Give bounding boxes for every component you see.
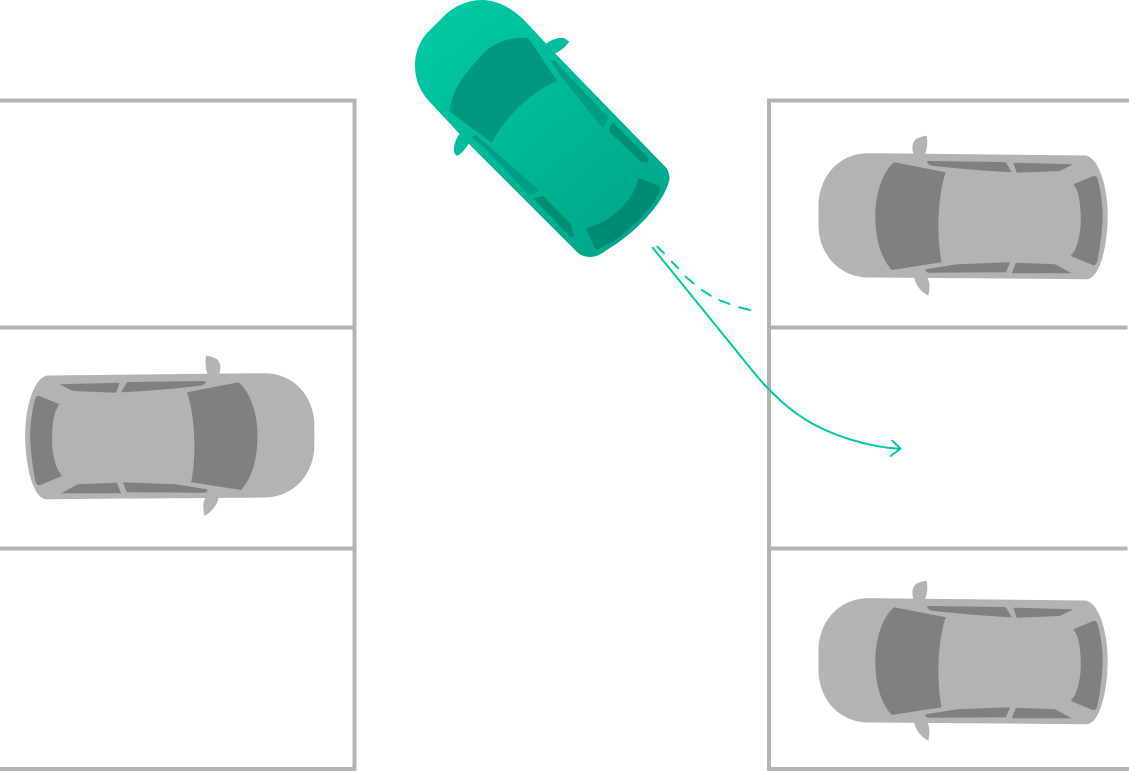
dashed line: alternative turning line (657, 247, 750, 310)
windscreen (450, 38, 557, 143)
rear window (586, 178, 660, 249)
parked grey car: right row, top bay (818, 136, 1108, 296)
body (415, 0, 669, 257)
side windows (551, 60, 608, 128)
green car turning into the bay (415, 0, 669, 257)
mirrors (454, 38, 569, 156)
arrow: driving path into the bay (653, 248, 900, 456)
parked grey car: right row, bottom bay (818, 581, 1108, 741)
parked grey car: left row, middle bay (25, 356, 314, 516)
parking bays: right row (769, 100, 1129, 769)
parking bays: left row (0, 100, 354, 769)
